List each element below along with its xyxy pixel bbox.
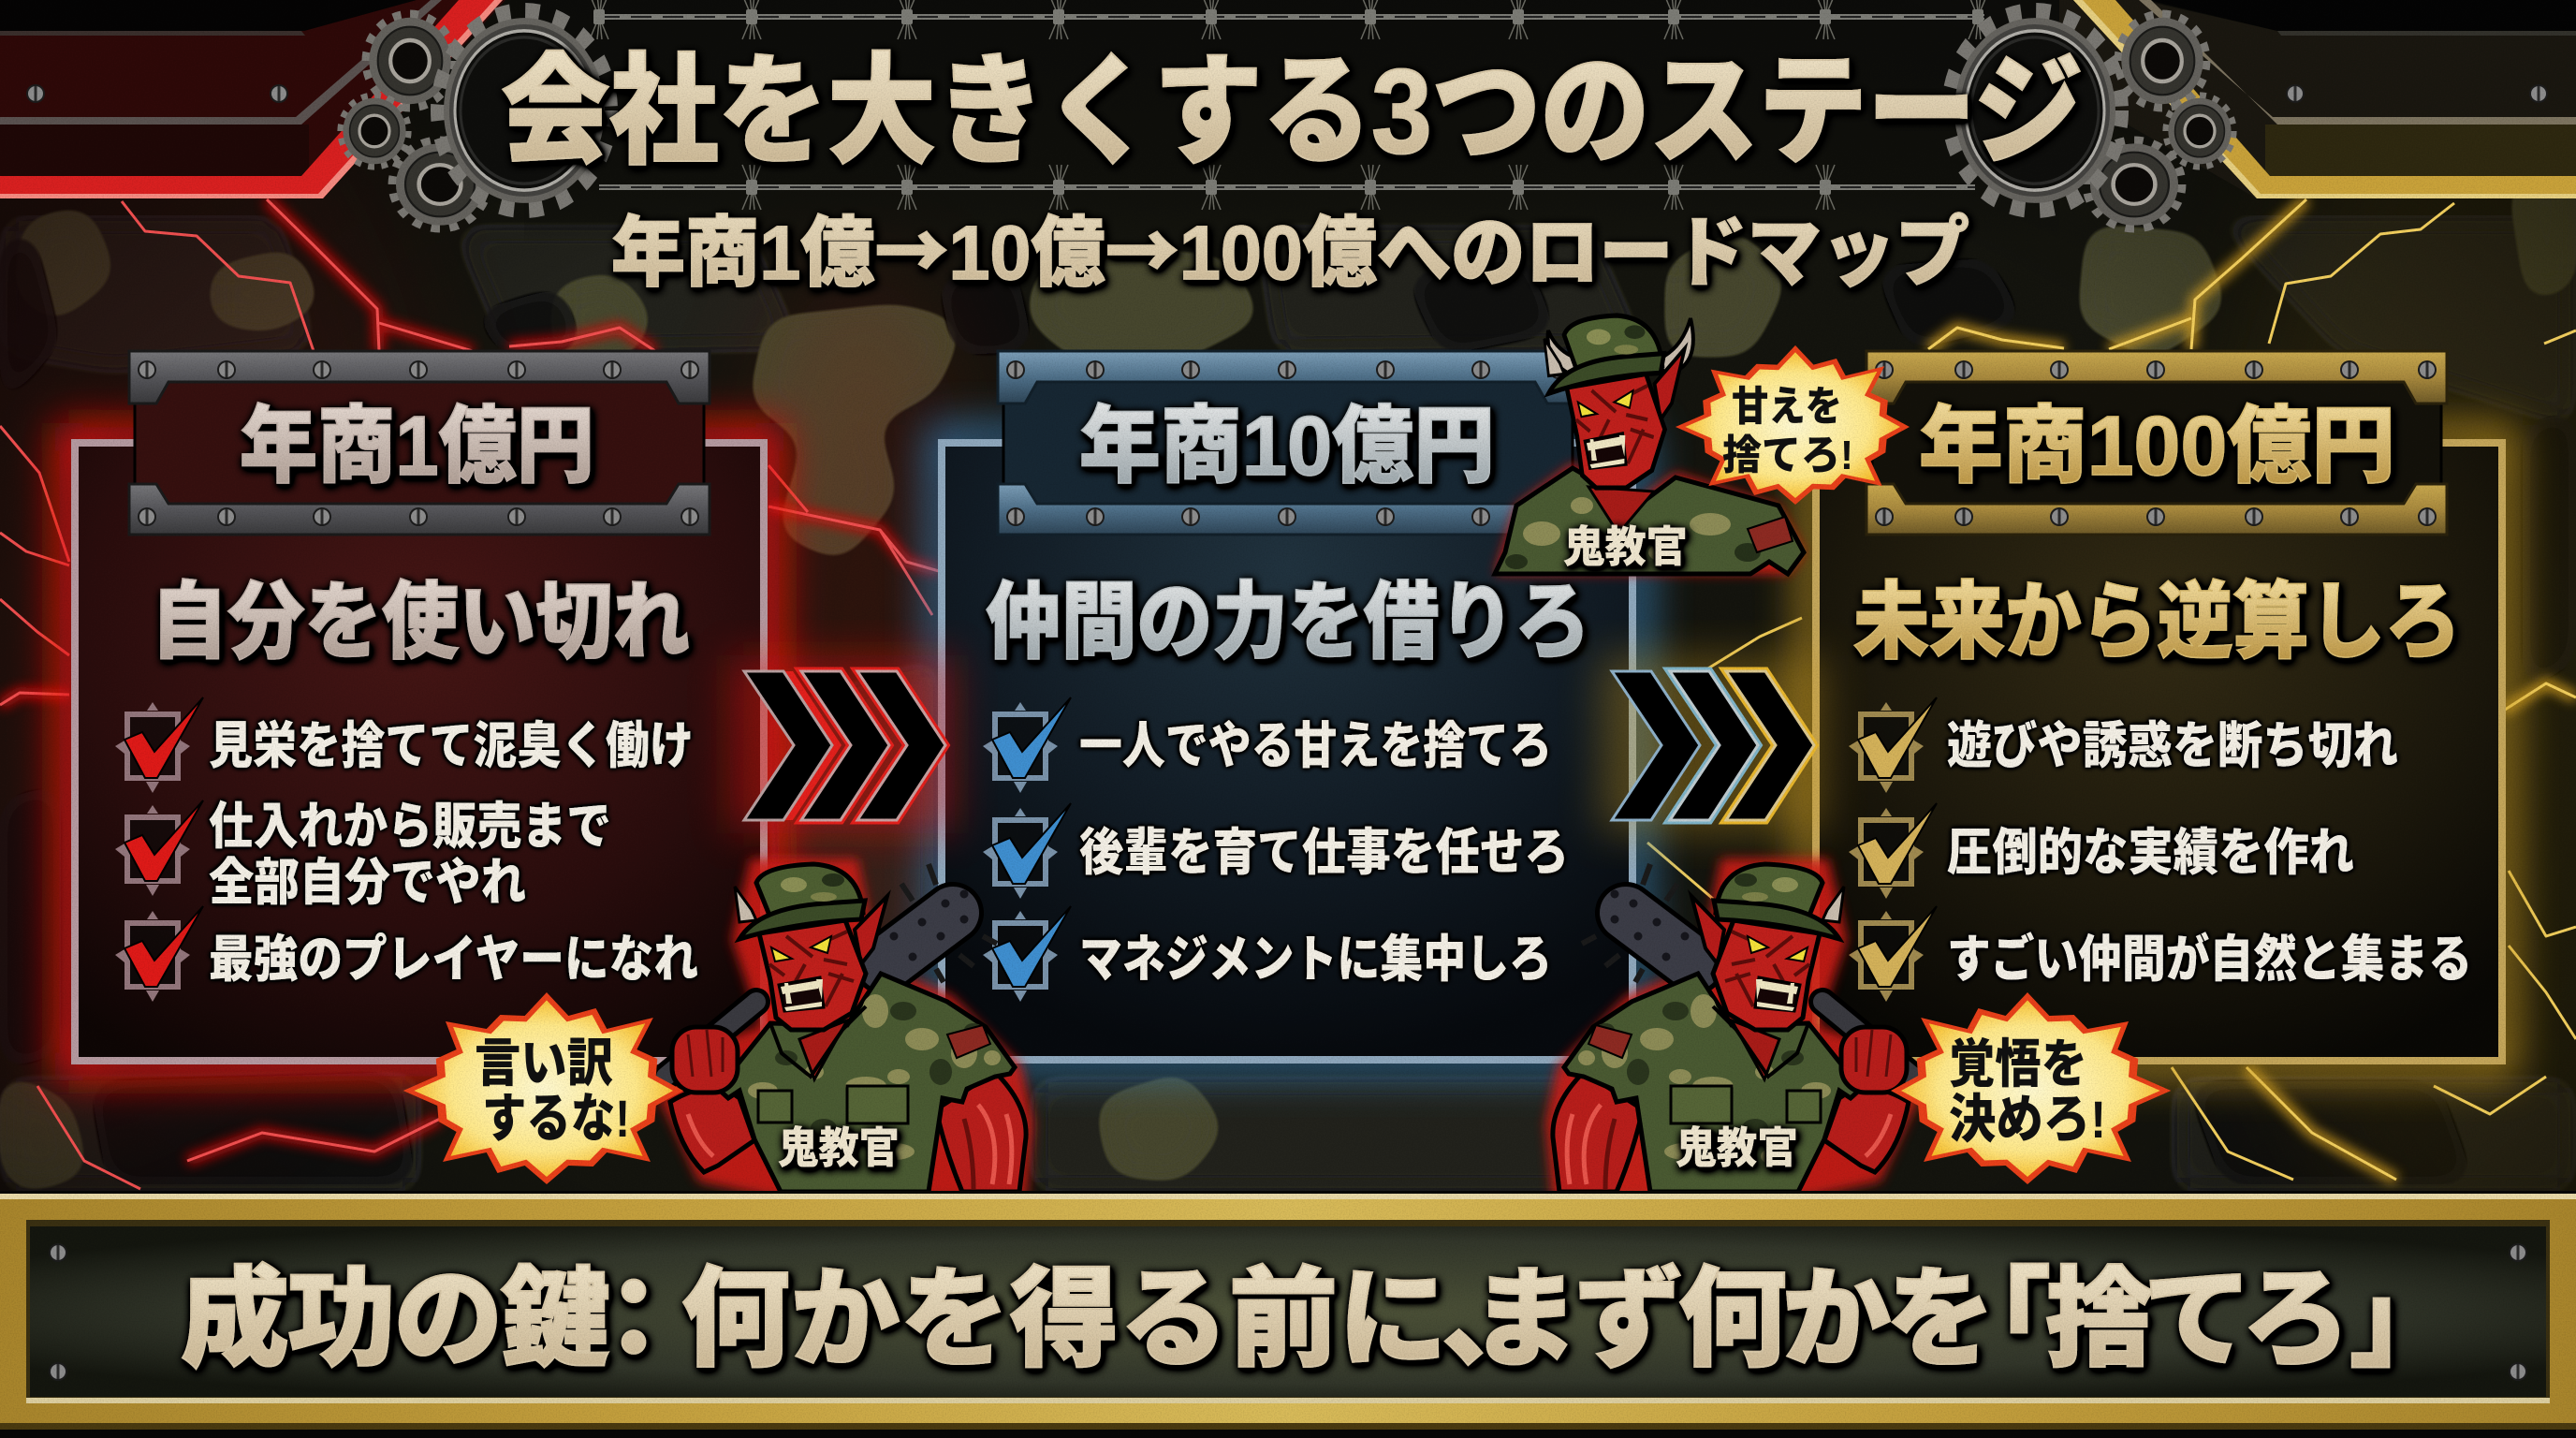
- header plate: [1866, 351, 2447, 535]
- bottom banner: [0, 1191, 2576, 1438]
- character: oni instructor right: [1553, 864, 1913, 1192]
- burst: 言い訳するな!: [403, 992, 683, 1184]
- stage heading: 未来から逆算しろ: [1853, 576, 2461, 669]
- title plate with barbed wire: [524, 0, 2059, 243]
- checklist: 最強のプレイヤーになれ: [209, 932, 698, 988]
- checklist: 圧倒的な実績を作れ: [1947, 825, 2354, 881]
- subtitle: 年商1億→10億→100億へのロードマップ: [611, 190, 1969, 301]
- character label: 鬼教官: [1563, 522, 1688, 571]
- checklist: [115, 697, 698, 1002]
- stage label: 年商100億円: [1919, 400, 2395, 493]
- burst: 覚悟を決めろ!: 覚悟を: [1949, 1034, 2087, 1093]
- character: oni instructor top: [1495, 315, 1804, 574]
- gears: right: [1950, 12, 2233, 228]
- checklist: マネジメントに集中しろ: [1079, 932, 1552, 988]
- barbed wire: bottom: [599, 165, 1975, 210]
- top metal bracket: gold: [1910, 0, 2576, 198]
- character label: 鬼教官: [778, 1123, 900, 1172]
- barbed wire: top: [590, 0, 1987, 39]
- header plate: [998, 351, 1578, 535]
- lightning cracks: gold: [1647, 199, 2576, 1180]
- burst: 言い訳するな!: 言い訳: [475, 1034, 613, 1093]
- checklist: 仕入れから販売まで: [209, 799, 611, 855]
- checklist: 全部自分でやれ: [209, 855, 526, 911]
- character label: 鬼教官: [1676, 1123, 1798, 1172]
- burst: 甘えを捨てろ!: 甘えを: [1732, 384, 1842, 430]
- arrow: stage 1 to 2: [730, 655, 955, 833]
- gears: left: [341, 12, 609, 228]
- checklist: [1849, 697, 2472, 1002]
- burst: 甘えを捨てろ!: 捨てろ!: [1722, 433, 1853, 478]
- stage label: 年商1億円: [240, 400, 594, 493]
- stage heading: 仲間の力を借りろ: [986, 576, 1590, 669]
- panel: 年商1億円: [71, 351, 768, 1064]
- header plate: [129, 351, 710, 535]
- checklist: [983, 697, 1569, 1002]
- checklist: すごい仲間が自然と集まる: [1947, 931, 2472, 988]
- checklist: 一人でやる甘えを捨てろ: [1079, 718, 1552, 774]
- stage label: 年商10億円: [1079, 400, 1495, 493]
- checklist: 後輩を育て仕事を任せろ: [1079, 825, 1569, 881]
- lightning cracks: red: [0, 199, 939, 1189]
- burst: 覚悟を決めろ!: [1891, 992, 2171, 1184]
- title: 会社を大きくする3つのステージ: [501, 45, 2083, 179]
- top metal bracket: red: [0, 0, 505, 198]
- banner text: 成功の鍵：何かを得る前に、まず何かを「捨てろ」: [181, 1258, 2458, 1380]
- checklist: 見栄を捨てて泥臭く働け: [209, 718, 694, 774]
- arrow: stage 2 to 3: [1601, 655, 1825, 833]
- checklist: 遊びや誘惑を断ち切れ: [1947, 718, 2398, 774]
- burst: 覚悟を決めろ!: 決めろ!: [1949, 1090, 2106, 1149]
- character: oni instructor left: [666, 864, 1026, 1192]
- rivets: [49, 1243, 2527, 1381]
- panel: 年商100億円: [1812, 351, 2502, 1064]
- burst: 言い訳するな!: するな!: [482, 1089, 630, 1148]
- burst: 甘えを捨てろ!: [1676, 345, 1910, 505]
- stage heading: 自分を使い切れ: [151, 576, 690, 669]
- panel: 年商10億円: [942, 351, 1636, 1060]
